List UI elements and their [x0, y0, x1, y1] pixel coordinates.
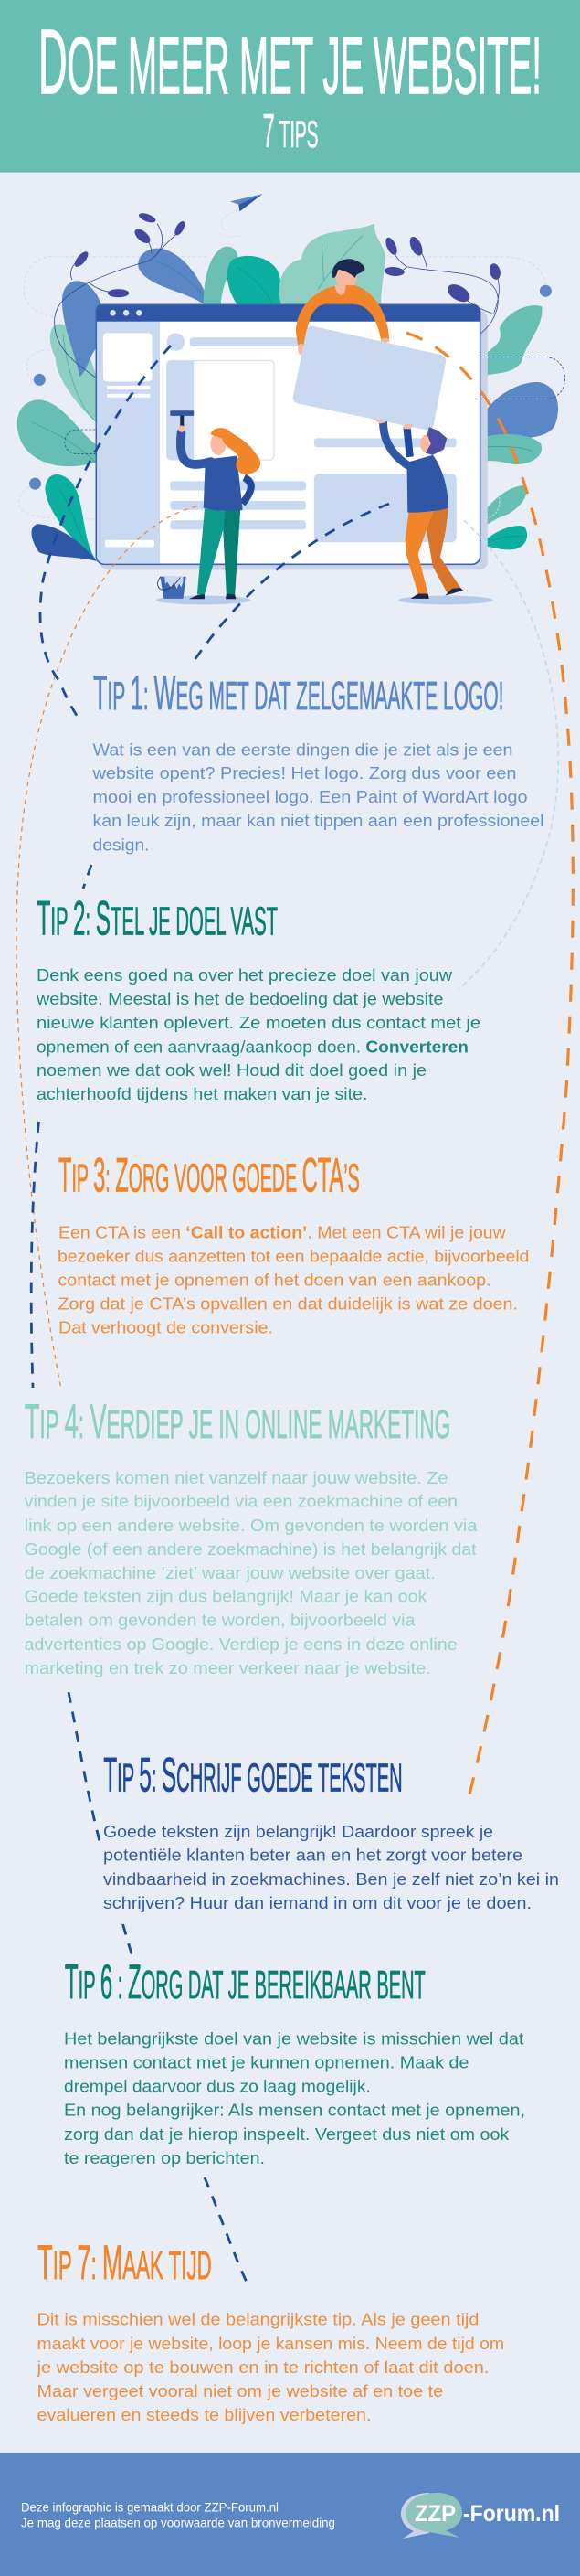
- tip 4 body: vinden je site bijvoorbeeld via een zoekmachine of een: [25, 1492, 458, 1511]
- window shadow: [100, 310, 488, 569]
- tip 4 body: Goede teksten zijn dus belangrijk! Maar je kan ook: [25, 1587, 427, 1606]
- tip 2 body: noemen we dat ook wel! Houd dit doel goed in je: [37, 1060, 427, 1080]
- tip 4 body: Bezoekers komen niet vanzelf naar jouw website. Ze: [25, 1468, 448, 1487]
- tip 3 body: bezoeker dus aanzetten tot een bepaalde actie, bijvoorbeeld: [58, 1246, 529, 1265]
- tip 1 body: website opent? Precies! Het logo. Zorg dus voor een: [91, 763, 517, 782]
- tip 2 body: [36, 965, 480, 1103]
- tip 1 body: Wat is een van de eerste dingen die je ziet als je een: [93, 740, 513, 759]
- tip 4 body: [25, 1468, 478, 1677]
- tip 2 heading: TIP 2: STEL JE DOEL VAST: [37, 891, 278, 945]
- paper plane: [220, 194, 263, 237]
- tip 3 body: Een CTA is een ‘Call to action’ . Met een CTA wil je jouw: [58, 1223, 506, 1241]
- tip 3 heading: TIP 3: ZORG VOOR GOEDE CTA’S: [58, 1149, 360, 1203]
- person: man holding card from above: [296, 259, 389, 355]
- tip 7: [36, 2236, 504, 2424]
- tip 1: [91, 666, 544, 854]
- tip 7 body: evalueren en steeds te blijven verbeteren.: [37, 2405, 371, 2424]
- tip 3 body: contact met je opnemen of het doen van een aankoop.: [58, 1271, 491, 1289]
- header banner: [0, 0, 580, 173]
- footer credit text: [21, 2499, 335, 2529]
- logo: ZZP-Forum.nl: ZZP: [415, 2501, 456, 2527]
- tip 2 body: achterhoofd tijdens het maken van je site.: [37, 1084, 367, 1103]
- tip 2: [36, 891, 480, 1103]
- tip 3 body: Zorg dat je CTA’s opvallen en dat duidelijk is wat ze doen.: [58, 1294, 518, 1314]
- tip 5 body: potentiële klanten beter aan en het zorgt voor betere: [103, 1846, 522, 1865]
- footer: [0, 2453, 580, 2576]
- tip 6 body: zorg dan dat je hierop inspeelt. Vergeet dus niet om ook: [64, 2124, 510, 2144]
- tip 6 body: drempel daarvoor dus zo laag mogelijk.: [64, 2077, 371, 2096]
- person: man lifting card: [371, 418, 463, 599]
- tip 5 body: vindbaarheid in zoekmachines. Ben je zelf niet zo’n kei in: [103, 1869, 559, 1889]
- card being carried: [293, 326, 446, 431]
- tip 1 body: design.: [93, 835, 150, 854]
- tip 7 body: Maar vergeet vooral niet om je website af en toe te: [37, 2381, 443, 2400]
- paint bucket: [158, 577, 186, 599]
- ground shadows: [156, 596, 493, 604]
- tip 4 body: Google (of een andere zoekmachine) is het belangrijk dat: [25, 1539, 477, 1559]
- tip 6 body: [64, 2028, 525, 2167]
- left vine: [55, 211, 187, 378]
- tip 7 body: je website op te bouwen en in te richten of laat dit doen.: [36, 2358, 490, 2377]
- browser window: [95, 304, 480, 564]
- leaves right: [480, 305, 558, 549]
- person: woman with paint roller: [170, 410, 260, 599]
- tip 5 body: Goede teksten zijn belangrijk! Daardoor spreek je: [103, 1822, 493, 1841]
- logo: ZZP-Forum.nl: -Forum.nl: [463, 2501, 560, 2527]
- illustration: website being built: [17, 194, 564, 604]
- subtitle: 7 TIPS: [263, 105, 318, 158]
- tip 5 body: [103, 1822, 559, 1912]
- tip 3: [58, 1149, 529, 1336]
- tip 7 body: [36, 2310, 504, 2424]
- footer credit text: Deze infographic is gemaakt door ZZP-Forum.nl: [21, 2499, 279, 2514]
- tip 2 body: nieuwe klanten oplevert. Ze moeten dus contact met je: [37, 1013, 480, 1032]
- logo: ZZP-Forum.nl: [401, 2493, 560, 2539]
- tip 1 body: kan leuk zijn, maar kan niet tippen aan een professioneel: [93, 811, 544, 830]
- tip 5: [103, 1748, 559, 1912]
- tip 1 body: [91, 740, 544, 854]
- decorative dots: [29, 285, 552, 490]
- leaves left: [17, 281, 103, 561]
- tip 6 body: Het belangrijkste doel van je website is misschien wel dat: [64, 2028, 523, 2048]
- tip 4: [25, 1395, 478, 1677]
- right vine: [384, 235, 502, 334]
- tip 3 body: [58, 1223, 529, 1336]
- tip 1 body: mooi en professioneel logo. Een Paint of WordArt logo: [93, 787, 528, 806]
- dashed connector lines: [16, 333, 573, 2288]
- leaves top: [138, 224, 385, 304]
- tip 4 body: link op een andere website. Om gevonden te worden via: [25, 1516, 478, 1535]
- tip 6: [64, 1955, 525, 2167]
- tip 4 body: betalen om gevonden te worden, bijvoorbeeld via: [25, 1611, 416, 1630]
- tip 2 body: Denk eens goed na over het precieze doel van jouw: [37, 965, 453, 985]
- tip 2 body: website. Meestal is het de bedoeling dat je website: [36, 989, 443, 1008]
- footer credit text: Je mag deze plaatsen op voorwaarde van bronvermelding: [21, 2515, 335, 2529]
- tip 4 body: advertenties op Google. Verdiep je eens in deze online: [25, 1634, 458, 1654]
- tip 6 body: mensen contact met je kunnen opnemen. Maak de: [64, 2053, 469, 2071]
- tip 7 body: Dit is misschien wel de belangrijkste tip. Als je geen tijd: [37, 2310, 479, 2329]
- tip 5 body: schrijven? Huur dan iemand in om dit voor je te doen.: [103, 1893, 532, 1912]
- tip 4 body: marketing en trek zo meer verkeer naar je website.: [25, 1658, 431, 1677]
- tip 2 body: opnemen of een aanvraag/aankoop doen. Converteren: [37, 1037, 469, 1056]
- tip 4 body: de zoekmachine ‘ziet’ waar jouw website over gaat.: [25, 1563, 436, 1582]
- tip 7 heading: TIP 7: MAAK TIJD: [37, 2236, 212, 2290]
- tip 3 body: Dat verhoogt de conversie.: [58, 1318, 273, 1336]
- tip 7 body: maakt voor je website, loop je kansen mis. Neem de tijd om: [37, 2334, 504, 2353]
- tip 6 body: En nog belangrijker: Als mensen contact met je opnemen,: [64, 2101, 525, 2120]
- tip 6 body: te reageren op berichten.: [64, 2148, 265, 2167]
